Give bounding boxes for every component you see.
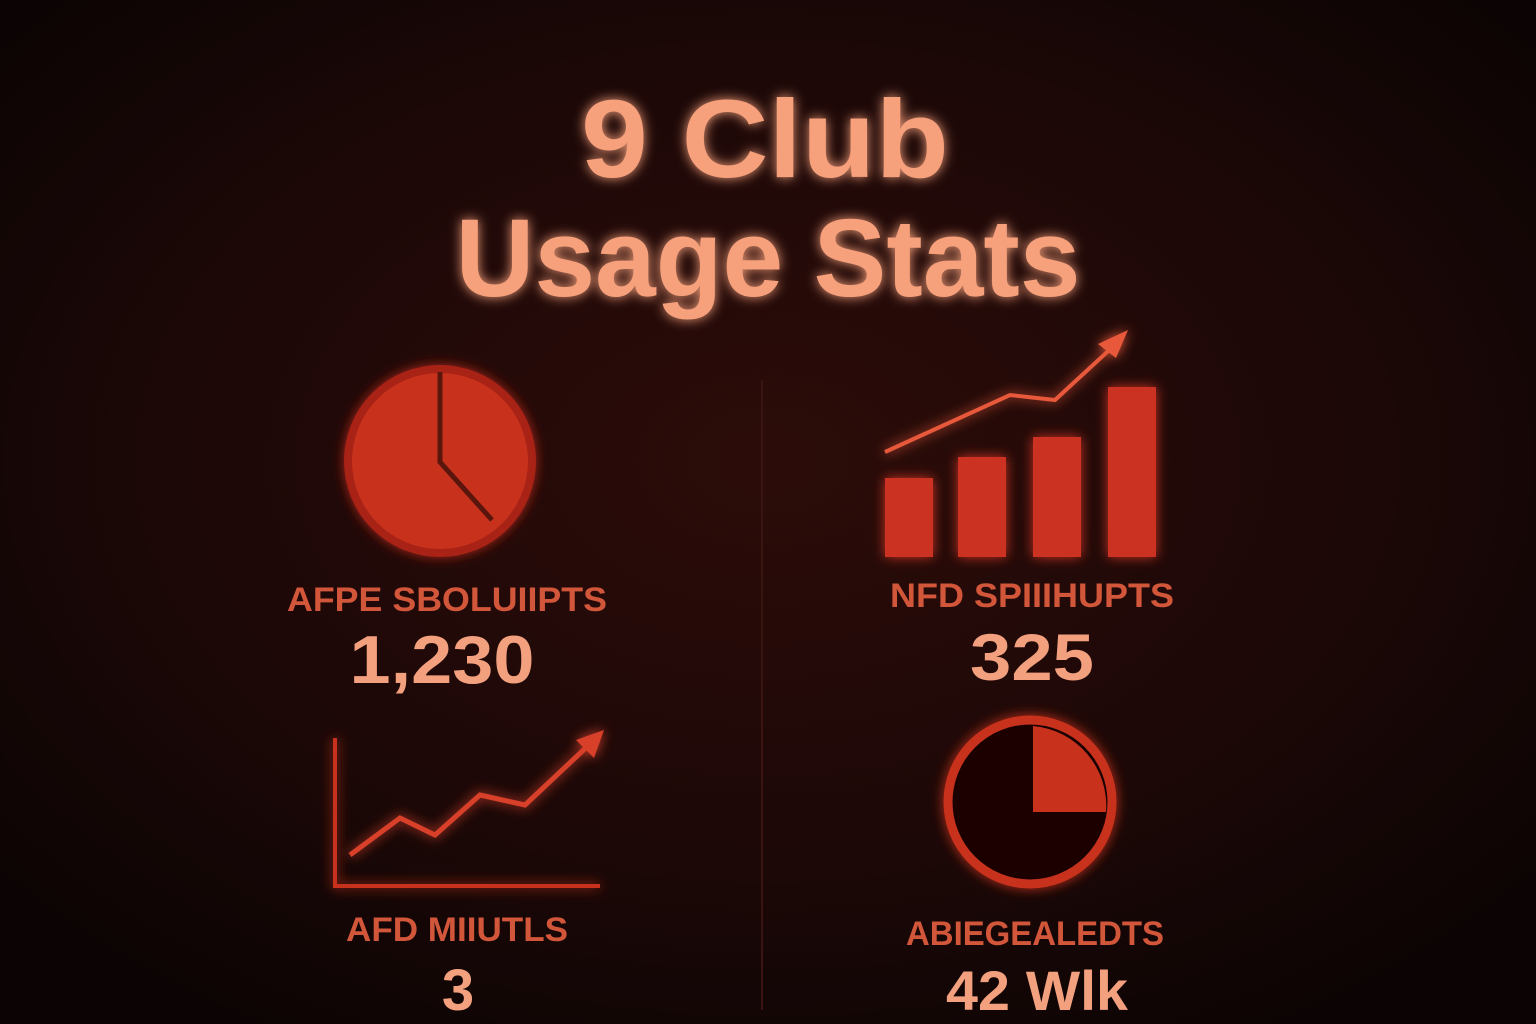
title: [456, 78, 1080, 320]
label: stat 2: [890, 577, 1174, 694]
icon: line chart: [335, 730, 604, 886]
label: stat 1: 1,230: [350, 622, 534, 698]
icon: pie chart 1: [348, 369, 532, 553]
label: stat 4: 42 Wlk: [946, 959, 1129, 1022]
label: stat 2: 325: [970, 620, 1094, 694]
title: Usage Stats: [456, 197, 1080, 320]
label: stat 1: [287, 581, 607, 698]
label: stat 1: AFPE SBOLUIIPTS: [287, 581, 607, 619]
icon: pie chart 2: [948, 720, 1112, 884]
label: stat 4: ABIEGEALEDTS: [906, 915, 1164, 953]
label: stat 3: 3: [442, 958, 474, 1023]
title: 9 Club: [581, 78, 949, 201]
icon: bar chart with trend arrow: [885, 330, 1156, 557]
label: stat 2: NFD SPIIIHUPTS: [890, 577, 1174, 615]
label: stat 4: [906, 915, 1164, 1022]
label: stat 3: [346, 911, 568, 1023]
label: stat 3: AFD MIIUTLS: [346, 911, 568, 949]
